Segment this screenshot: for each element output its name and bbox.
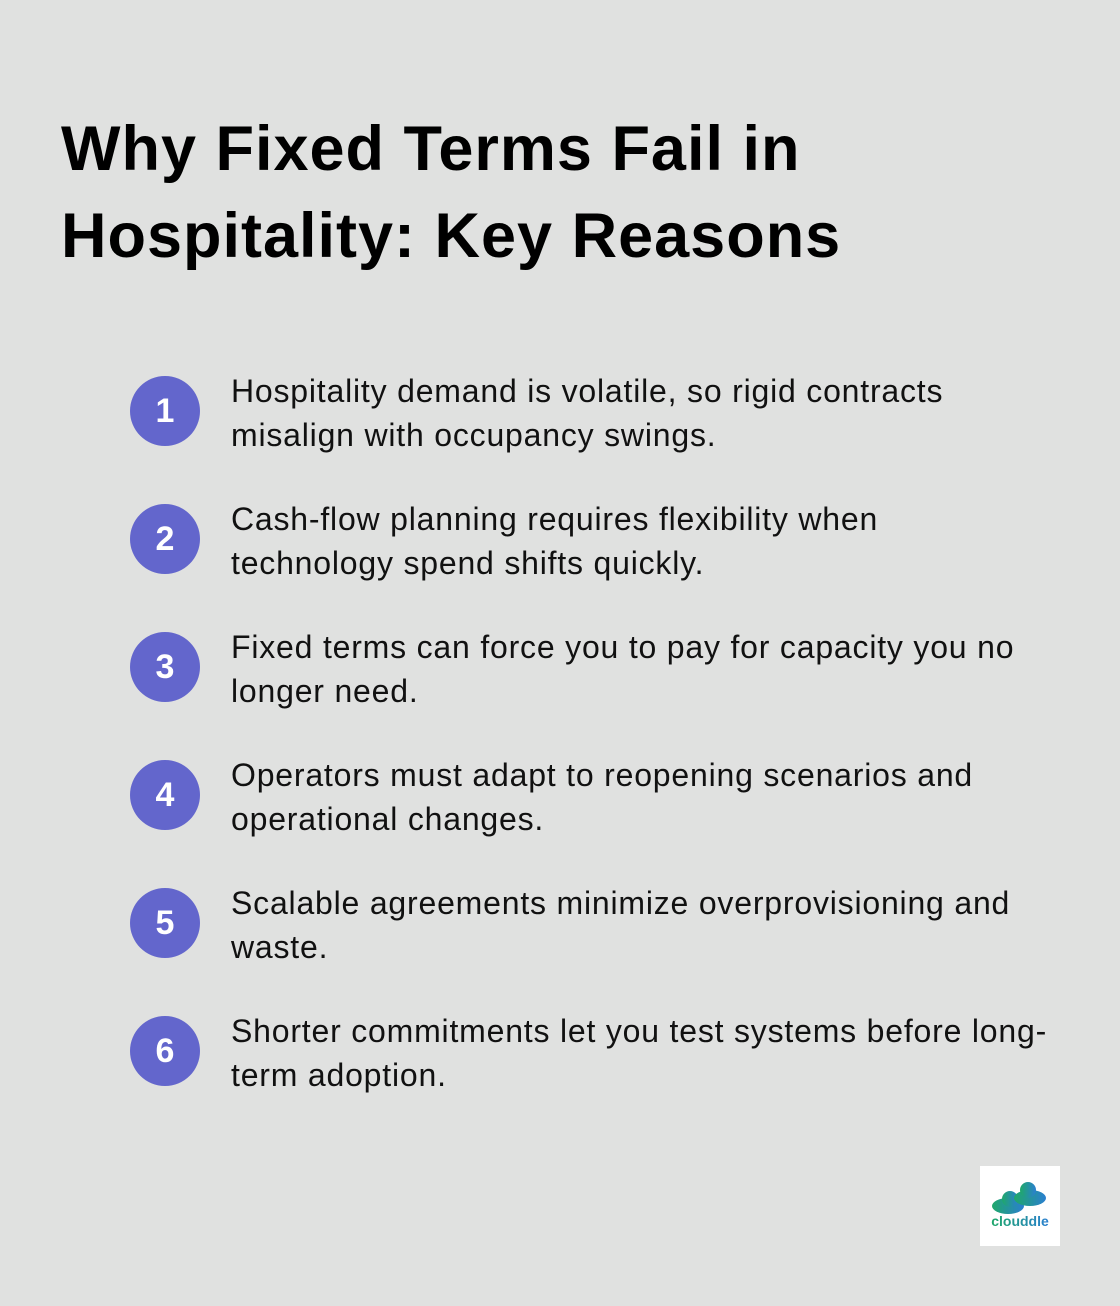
item 4 <box>130 757 973 837</box>
item 2: technology spend shifts quickly. <box>231 545 704 581</box>
item 3: longer need. <box>231 673 419 709</box>
item 1: Hospitality demand is volatile, so rigid contracts <box>231 373 943 409</box>
item 3: 3 <box>156 648 174 686</box>
item 3: Fixed terms can force you to pay for capacity you no <box>231 629 1014 665</box>
item 4: 4 <box>156 776 174 814</box>
item 4: Operators must adapt to reopening scenarios and <box>231 757 973 793</box>
item 5: Scalable agreements minimize overprovisioning and <box>231 885 1010 921</box>
item 6 <box>130 1013 1047 1093</box>
logo: clouddle <box>991 1213 1049 1229</box>
item 5: waste. <box>231 929 328 965</box>
title <box>61 114 841 271</box>
item 2: 2 <box>156 520 174 558</box>
item 6: term adoption. <box>231 1057 447 1093</box>
item 4: operational changes. <box>231 801 544 837</box>
item 1: misalign with occupancy swings. <box>231 417 716 453</box>
item 6: 6 <box>156 1032 174 1070</box>
title: Why Fixed Terms Fail in <box>61 114 800 184</box>
item 5 <box>130 885 1010 965</box>
item 5: 5 <box>156 904 174 942</box>
item 6: Shorter commitments let you test systems before long- <box>231 1013 1047 1049</box>
item 1: 1 <box>156 392 174 430</box>
item 3 <box>130 629 1014 709</box>
logo <box>980 1166 1060 1246</box>
item 2: Cash-flow planning requires flexibility when <box>231 501 878 537</box>
item 2 <box>130 501 878 581</box>
item 1 <box>130 373 943 453</box>
title: Hospitality: Key Reasons <box>61 201 841 271</box>
